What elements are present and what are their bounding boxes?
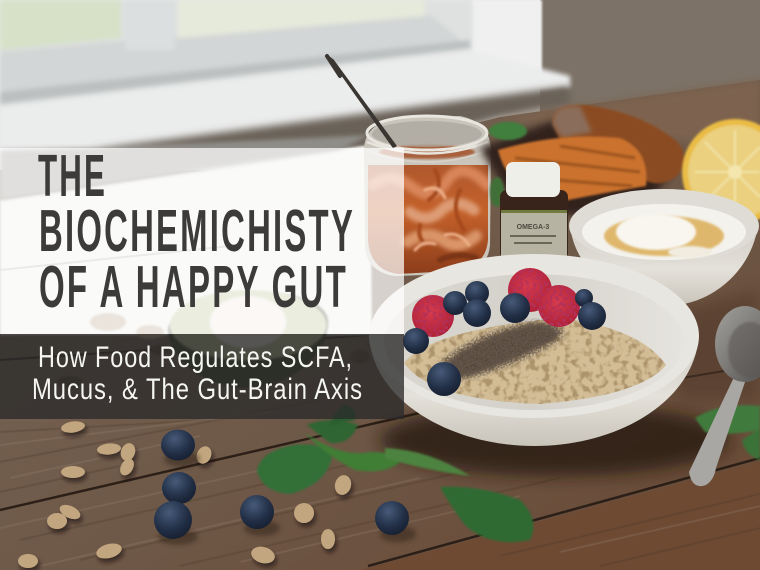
background scene: window and wall [0, 0, 760, 170]
title panel: translucent white [0, 148, 404, 334]
title: OF A HAPPY GUT [39, 254, 348, 320]
white cloth behind title [0, 145, 372, 335]
subtitle [32, 341, 363, 406]
window pane right [178, 0, 425, 38]
oats [404, 318, 666, 404]
subtitle panel: translucent dark [0, 334, 404, 419]
subtitle: How Food Regulates SCFA, [38, 341, 353, 374]
spoon handle in jar [329, 57, 396, 147]
scattered seeds [18, 420, 353, 568]
raspberries [412, 295, 454, 337]
plank gaps [0, 411, 428, 510]
jar rim [366, 116, 489, 162]
yogurt bowl [569, 189, 759, 306]
wall [540, 0, 760, 120]
sweet potatoes [480, 105, 684, 215]
oatmeal bowl [369, 254, 699, 446]
omega-3 supplement bottle [500, 162, 568, 260]
avocado [168, 290, 328, 388]
omega-3 supplement bottle: OMEGA-3 [517, 224, 549, 231]
blueberries in bowl [465, 281, 489, 305]
window sill [0, 52, 570, 158]
window pane left [0, 0, 121, 50]
cashews on cloth [58, 313, 370, 388]
chia seeds [440, 324, 558, 377]
jar of kimchi [327, 56, 491, 276]
spinach right edge [695, 405, 760, 460]
blueberries on table [154, 430, 416, 545]
spinach leaves on table [257, 405, 533, 542]
serving spoon [689, 306, 760, 486]
subtitle: Mucus, & The Gut-Brain Axis [32, 373, 363, 406]
window frame [0, 0, 472, 108]
title: THE [38, 143, 107, 209]
wood grain [0, 400, 760, 566]
title [38, 143, 355, 320]
lemon [682, 119, 760, 225]
spinach behind [489, 122, 527, 140]
shadow under bowl [380, 404, 730, 476]
title: BIOCHEMICHISTY [39, 198, 355, 264]
